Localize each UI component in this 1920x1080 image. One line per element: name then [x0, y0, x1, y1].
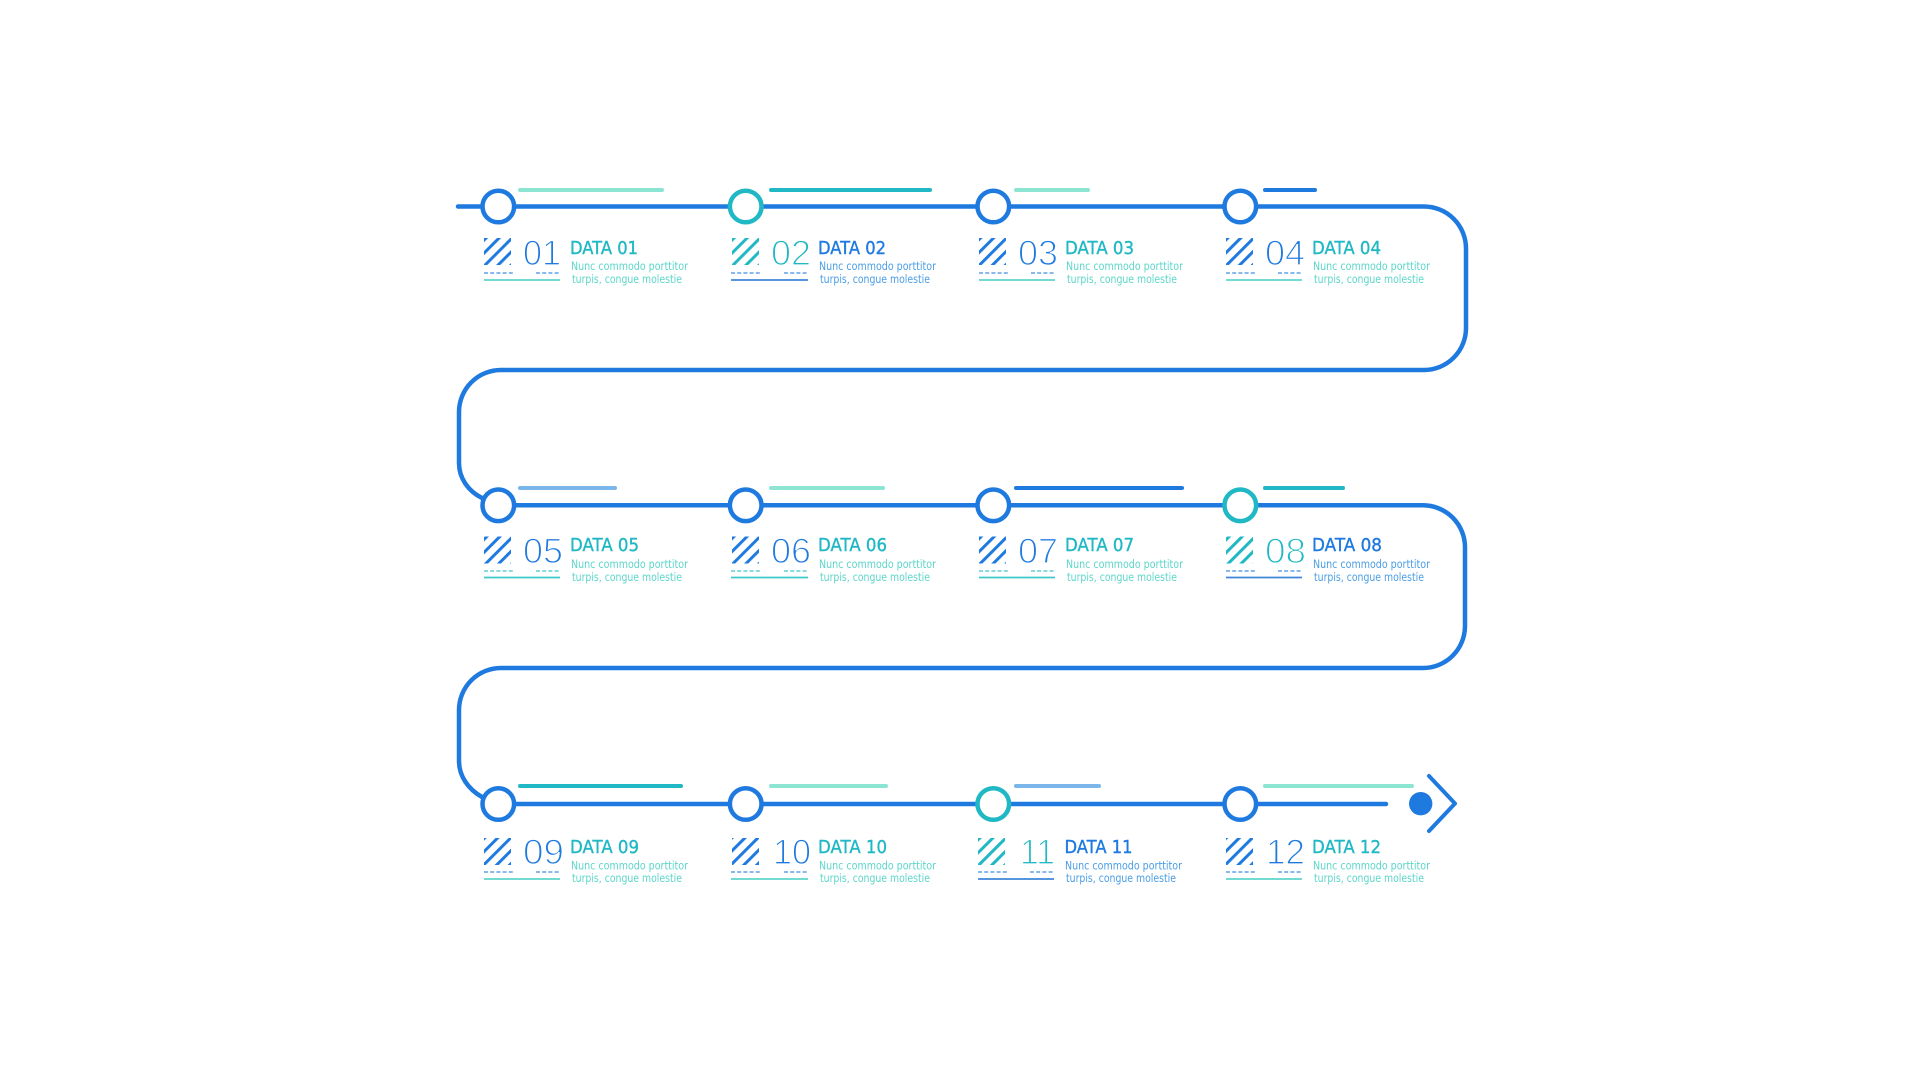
node 05 — [482, 490, 514, 521]
hatch icon 08 — [1226, 536, 1253, 564]
accent bar 04 — [1263, 188, 1317, 192]
node 12 — [1224, 788, 1256, 820]
description 04: Nunc commodo porttitor — [1313, 259, 1430, 273]
description 05: Nunc commodo porttitor — [571, 557, 688, 571]
arrow head — [1409, 776, 1455, 831]
description 04: turpis, congue molestie — [1314, 272, 1424, 286]
dashes 09 — [484, 871, 560, 873]
hatch icon 09 — [484, 838, 511, 865]
hatch icon 03 — [979, 238, 1006, 265]
number 12: 12 — [1266, 833, 1305, 872]
node 07 — [978, 490, 1009, 521]
hatch icon 05 — [484, 536, 511, 564]
accent bar 01 — [518, 188, 664, 192]
description 12: Nunc commodo porttitor — [1313, 858, 1430, 872]
description 01: Nunc commodo porttitor — [571, 259, 688, 273]
number 08: 08 — [1265, 532, 1306, 571]
label 01: DATA 01 — [570, 238, 638, 259]
label 10: DATA 10 — [818, 837, 887, 858]
description 07: Nunc commodo porttitor — [1066, 557, 1183, 571]
hatch icon 10 — [732, 838, 759, 865]
accent bar 12 — [1263, 784, 1414, 788]
underline 07 — [979, 576, 1055, 578]
description 03: turpis, congue molestie — [1067, 272, 1177, 286]
hatch icon 11 — [978, 838, 1005, 865]
number 05: 05 — [523, 532, 563, 571]
number 02: 02 — [771, 234, 811, 273]
underline 05 — [484, 576, 560, 578]
hatch icon 12 — [1226, 838, 1253, 865]
accent bar 07 — [1014, 486, 1184, 490]
underline 04 — [1226, 279, 1302, 281]
number 06: 06 — [771, 532, 811, 571]
description 11: turpis, congue molestie — [1066, 871, 1176, 885]
accent bar 06 — [769, 486, 885, 490]
underline 09 — [484, 878, 560, 880]
winding timeline path — [458, 206, 1466, 804]
step 02 — [730, 188, 936, 286]
hatch icon 01 — [484, 238, 511, 265]
dashes 05 — [484, 570, 560, 572]
dashes 07 — [979, 570, 1055, 572]
step 10 — [730, 784, 936, 885]
label 07: DATA 07 — [1065, 535, 1134, 556]
description 11: Nunc commodo porttitor — [1065, 858, 1182, 872]
label 05: DATA 05 — [570, 535, 639, 556]
accent bar 10 — [769, 784, 888, 788]
step 01 — [482, 188, 688, 286]
description 06: Nunc commodo porttitor — [819, 557, 936, 571]
dashes 02 — [731, 272, 808, 274]
description 08: turpis, congue molestie — [1314, 570, 1424, 584]
label 12: DATA 12 — [1312, 837, 1381, 858]
description 02: Nunc commodo porttitor — [819, 259, 936, 273]
underline 02 — [731, 279, 808, 281]
dashes 04 — [1226, 272, 1302, 274]
description 05: turpis, congue molestie — [572, 570, 682, 584]
node 11 — [978, 788, 1009, 820]
underline 03 — [979, 279, 1055, 281]
dashes 03 — [979, 272, 1055, 274]
dashes 01 — [484, 272, 560, 274]
node 06 — [730, 490, 762, 521]
node 09 — [482, 788, 514, 820]
description 01: turpis, congue molestie — [572, 272, 682, 286]
underline 10 — [731, 878, 808, 880]
number 04: 04 — [1265, 234, 1305, 273]
dashes 12 — [1226, 871, 1302, 873]
dashes 11 — [978, 871, 1054, 873]
description 10: turpis, congue molestie — [820, 871, 930, 885]
number 07: 07 — [1018, 532, 1058, 571]
description 03: Nunc commodo porttitor — [1066, 259, 1183, 273]
accent bar 11 — [1014, 784, 1101, 788]
accent bar 03 — [1014, 188, 1090, 192]
node 02 — [730, 191, 762, 222]
accent bar 05 — [518, 486, 617, 490]
step 03 — [978, 188, 1183, 286]
accent bar 09 — [518, 784, 683, 788]
hatch icon 07 — [979, 536, 1006, 564]
step 11 — [978, 784, 1182, 885]
underline 12 — [1226, 878, 1302, 880]
label 04: DATA 04 — [1312, 238, 1381, 259]
label 02: DATA 02 — [818, 238, 886, 259]
accent bar 08 — [1263, 486, 1345, 490]
number 03: 03 — [1018, 234, 1058, 273]
step 07 — [978, 486, 1184, 584]
number 11: 11 — [1020, 833, 1055, 872]
description 08: Nunc commodo porttitor — [1313, 557, 1430, 571]
step 06 — [730, 486, 936, 584]
node 01 — [482, 191, 514, 222]
label 06: DATA 06 — [818, 535, 887, 556]
description 10: Nunc commodo porttitor — [819, 858, 936, 872]
description 12: turpis, congue molestie — [1314, 871, 1424, 885]
label 11: DATA 11 — [1064, 837, 1132, 858]
step 05 — [482, 486, 688, 584]
dashes 08 — [1226, 570, 1302, 572]
description 09: Nunc commodo porttitor — [571, 858, 688, 872]
accent bar 02 — [769, 188, 932, 192]
label 03: DATA 03 — [1065, 238, 1134, 259]
node 10 — [730, 788, 762, 820]
number 10: 10 — [773, 833, 811, 872]
dashes 06 — [731, 570, 808, 572]
step 09 — [482, 784, 688, 885]
hatch icon 02 — [732, 238, 759, 265]
number 09: 09 — [523, 833, 564, 872]
underline 01 — [484, 279, 560, 281]
number 01: 01 — [523, 234, 561, 273]
underline 11 — [978, 878, 1054, 880]
description 02: turpis, congue molestie — [820, 272, 930, 286]
step 08 — [1224, 486, 1430, 584]
hatch icon 06 — [732, 536, 759, 564]
node 04 — [1224, 191, 1256, 222]
hatch icon 04 — [1226, 238, 1253, 265]
label 08: DATA 08 — [1312, 535, 1382, 556]
dashes 10 — [731, 871, 808, 873]
description 09: turpis, congue molestie — [572, 871, 682, 885]
description 06: turpis, congue molestie — [820, 570, 930, 584]
label 09: DATA 09 — [570, 837, 639, 858]
underline 08 — [1226, 576, 1302, 578]
description 07: turpis, congue molestie — [1067, 570, 1177, 584]
step 04 — [1224, 188, 1430, 286]
step 12 — [1224, 784, 1430, 885]
node 08 — [1224, 490, 1256, 521]
underline 06 — [731, 576, 808, 578]
node 03 — [978, 191, 1009, 222]
